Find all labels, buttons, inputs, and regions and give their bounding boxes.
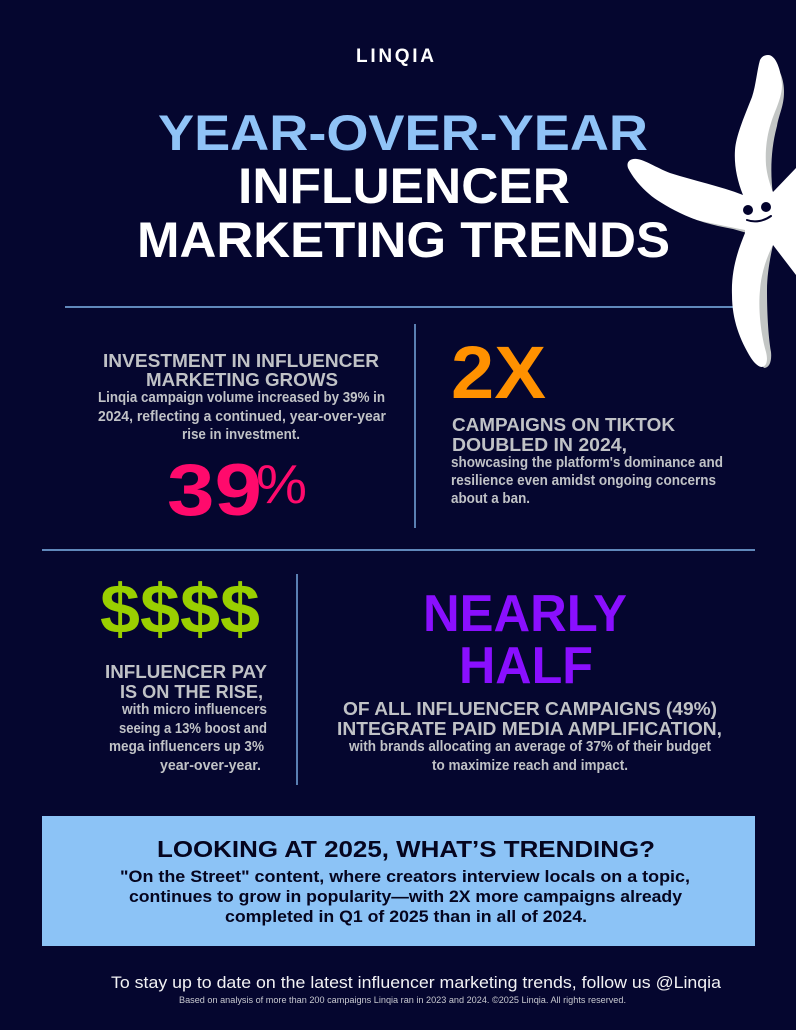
panel: influencer pay [100, 570, 267, 774]
stat: 2X: 2X [451, 331, 546, 414]
heading: paid media: OF ALL INFLUENCER CAMPAIGNS (49%) [343, 699, 717, 719]
text: investment description [98, 389, 386, 443]
stat: nearly half: NEARLY [423, 585, 627, 643]
footnote: Based on analysis of more than 200 campaigns Linqia ran in 2023 and 2024. ©2025 Linqia. All rights reserved. [179, 995, 626, 1005]
callout: looking at 2025 [42, 816, 755, 946]
title [137, 105, 670, 268]
callout text: "On the Street" content, where creators interview locals on a topic, [120, 867, 690, 886]
title: YEAR-OVER-YEAR [158, 105, 648, 161]
text: investment description: 2024, reflecting a continued, year-over-year [98, 408, 386, 425]
heading: TikTok: DOUBLED IN 2024, [452, 435, 627, 455]
heading: paid media: INTEGRATE PAID MEDIA AMPLIFICATION, [337, 719, 722, 739]
text: investment description: rise in investment. [182, 426, 300, 443]
text: TikTok description: showcasing the platform's dominance and [451, 454, 723, 471]
text: influencer pay description: year-over-year. [160, 757, 261, 774]
heading: investment [103, 351, 379, 390]
heading: TikTok: CAMPAIGNS ON TIKTOK [452, 415, 675, 435]
text: influencer pay description: seeing a 13% boost and [119, 720, 267, 737]
callout text: continues to grow in popularity—with 2X more campaigns already [129, 887, 683, 906]
text: paid media description: to maximize reach and impact. [432, 757, 628, 774]
text: investment description: Linqia campaign volume increased by 39% in [98, 389, 385, 406]
logo: Linqia: LINQIA [356, 46, 434, 67]
heading: influencer pay: INFLUENCER PAY [105, 662, 267, 682]
footer call to action: To stay up to date on the latest influencer marketing trends, follow us @Linqia [111, 973, 722, 992]
panel: investment growth [98, 351, 386, 531]
text: influencer pay description: with micro influencers [121, 701, 267, 718]
stat: nearly half [423, 585, 627, 695]
icon: starfish eyes and smile [743, 202, 771, 221]
title: INFLUENCER [238, 158, 570, 214]
text: TikTok description: about a ban. [451, 490, 530, 507]
heading: paid media [337, 699, 722, 739]
heading: influencer pay [105, 662, 267, 702]
text: paid media description [348, 738, 711, 774]
heading: investment: INVESTMENT IN INFLUENCER [103, 351, 379, 371]
heading: investment: MARKETING GROWS [146, 370, 338, 390]
text: influencer pay description: mega influencers up 3% [109, 738, 264, 755]
text: TikTok description [451, 454, 723, 507]
callout text [120, 867, 690, 926]
icon: dollar signs: $$$$ [100, 570, 260, 648]
text: paid media description: with brands allocating an average of 37% of their budget [348, 738, 711, 755]
text: TikTok description: resilience even amidst ongoing concerns [451, 472, 716, 489]
panel: TikTok campaigns [451, 331, 723, 507]
panel: paid media amplification [337, 585, 722, 774]
stat: 39%: % [256, 453, 307, 515]
stat: nearly half: HALF [459, 637, 593, 695]
stat: 39% [167, 450, 307, 531]
heading: TikTok [452, 415, 675, 455]
heading: influencer pay: IS ON THE RISE, [120, 682, 263, 702]
text: influencer pay description [109, 701, 267, 774]
icon: smiling starfish [627, 55, 796, 368]
callout text: completed in Q1 of 2025 than in all of 2024. [225, 907, 587, 926]
title: MARKETING TRENDS [137, 212, 670, 268]
callout heading: LOOKING AT 2025, WHAT’S TRENDING? [157, 836, 655, 862]
stat: 39%: 39 [167, 450, 262, 531]
